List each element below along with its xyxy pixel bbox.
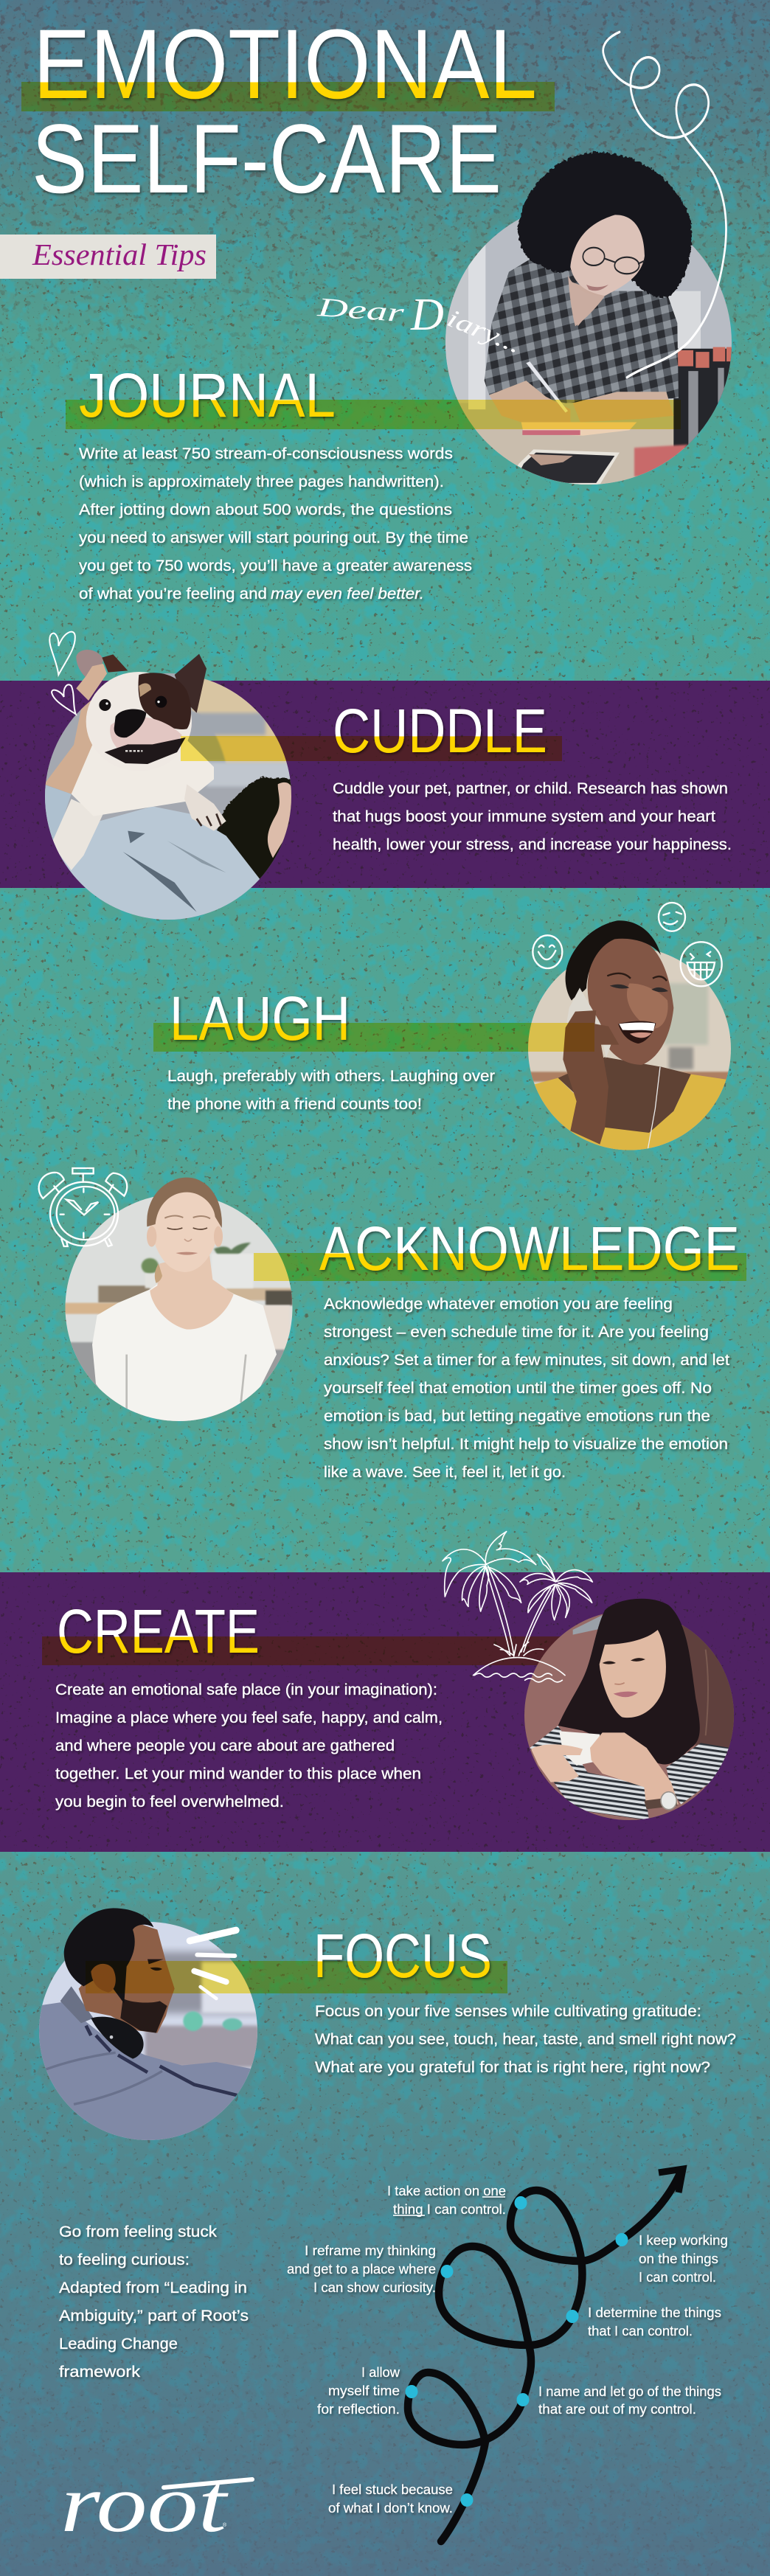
band: cuddle purple panel — [0, 681, 770, 888]
text: go from feeling stuck: to feeling curious: — [59, 2252, 190, 2268]
labels: path steps: that are out of my control. — [538, 2401, 696, 2417]
handwriting: dear diary: iary... — [443, 305, 525, 359]
band: acknowledge — [254, 1253, 746, 1281]
labels: path steps: that I can control. — [588, 2323, 693, 2339]
labels: path steps: and get to a place where — [287, 2261, 436, 2277]
labels: path steps: I feel stuck because — [332, 2482, 453, 2497]
text: focus body — [315, 2003, 736, 2076]
heading: focus: FOCUS — [313, 1921, 492, 1990]
band: create — [42, 1636, 570, 1665]
heading: laugh: LAUGH — [170, 984, 350, 1053]
text: focus body: Focus on your five senses while cultivating gratitude: — [315, 2003, 701, 2020]
text: create body — [55, 1681, 443, 1811]
text: create body: together. Let your mind wander to this place when — [55, 1766, 421, 1782]
icon: hearts — [49, 632, 76, 714]
text: laugh body: the phone with a friend counts too! — [167, 1096, 422, 1113]
text: journal body: (which is approximately three pages handwritten). — [79, 473, 444, 490]
text: journal body: of what you’re feeling and — [79, 586, 267, 603]
text: journal body: After jotting down about 500 words, the questions — [79, 501, 452, 518]
subtitle: essential tips — [0, 235, 216, 279]
text: acknowledge body: emotion is bad, but letting negative emotions run the — [324, 1408, 710, 1425]
labels: path steps: I determine the things — [588, 2305, 721, 2320]
text: go from feeling stuck: Ambiguity,” part of Root’s — [59, 2308, 249, 2325]
text: acknowledge body: anxious? Set a timer for a few minutes, sit down, and let — [324, 1352, 729, 1369]
labels: path steps: I can show curiosity. — [313, 2280, 436, 2295]
icon: curly ribbon line — [603, 32, 726, 378]
text: cuddle body: that hugs boost your immune system and your heart — [333, 808, 715, 825]
text: laugh body: Laugh, preferably with others. Laughing over — [167, 1068, 495, 1085]
icon: alarm clock — [39, 1168, 127, 1246]
labels: path steps: myself time — [328, 2383, 400, 2398]
text: go from feeling stuck: framework — [59, 2364, 141, 2381]
text: create body: and where people you care about are gathered — [55, 1737, 395, 1754]
text: create body: you begin to feel overwhelmed. — [55, 1794, 284, 1811]
labels: path steps: I keep working — [639, 2232, 728, 2248]
band: cuddle — [181, 736, 562, 761]
face — [570, 215, 645, 296]
logo: root: root — [60, 2458, 229, 2549]
text: cuddle body: Cuddle your pet, partner, or child. Research has shown — [333, 780, 728, 797]
labels: path steps: on the things — [639, 2251, 718, 2266]
labels: path steps: of what I don’t know. — [328, 2500, 453, 2516]
band: create purple panel — [0, 1572, 770, 1852]
title band — [21, 82, 555, 111]
title — [32, 10, 537, 214]
text: journal body: may even feel better. — [271, 586, 424, 603]
handwriting: dear diary — [316, 290, 525, 359]
dots on path — [406, 2196, 628, 2507]
text: focus body: What can you see, touch, hear, taste, and smell right now? — [315, 2031, 736, 2048]
labels: path steps: I take action on one — [387, 2183, 506, 2198]
band: focus — [86, 1961, 507, 1993]
handwriting: dear diary: Dear — [316, 292, 406, 327]
photo: meditating woman — [64, 1178, 295, 1426]
labels: path steps: for reflection. — [317, 2401, 400, 2417]
hair — [518, 152, 692, 297]
text: create body: Create an emotional safe place (in your imagination): — [55, 1681, 437, 1698]
photo: woman with cup — [521, 1599, 738, 1824]
text: acknowledge body: like a wave. See it, feel it, let it go. — [324, 1464, 566, 1481]
labels: path steps: thing I can control. — [393, 2201, 506, 2217]
heading: create: CREATE — [57, 1597, 260, 1666]
labels: path steps: I can control. — [639, 2269, 716, 2285]
text: laugh body — [167, 1068, 495, 1113]
text: create body: Imagine a place where you feel safe, happy, and calm, — [55, 1709, 443, 1726]
text: acknowledge body — [324, 1296, 729, 1481]
text: acknowledge body: yourself feel that emotion until the timer goes off. No — [324, 1380, 712, 1397]
text: journal body — [79, 445, 472, 603]
icon: smiley faces — [533, 903, 722, 986]
subtitle: essential tips: Essential Tips — [32, 237, 207, 271]
text: acknowledge body: show isn’t helpful. It might help to visualize the emotion — [324, 1436, 728, 1453]
labels: path steps: I allow — [361, 2364, 400, 2380]
text: journal body: Write at least 750 stream-of-consciousness words — [79, 445, 453, 462]
text: acknowledge body: strongest – even schedule time for it. Are you feeling — [324, 1324, 709, 1341]
text: go from feeling stuck: Leading Change — [59, 2336, 178, 2353]
photo: laughing woman on phone — [526, 920, 732, 1156]
photo: man with headphones — [37, 1908, 260, 2144]
title: EMOTIONAL — [33, 10, 537, 119]
icon: palm island — [443, 1532, 592, 1682]
logo: root: ® — [223, 2522, 227, 2528]
text: acknowledge body: Acknowledge whatever emotion you are feeling — [324, 1296, 673, 1313]
text: cuddle body — [333, 780, 732, 853]
text: journal body: you need to answer will start pouring out. By the time — [79, 530, 468, 546]
chart: looping path arrow — [406, 2169, 683, 2541]
photo: woman journaling — [443, 152, 738, 499]
labels: path steps: I reframe my thinking — [305, 2243, 436, 2258]
text: go from feeling stuck — [59, 2223, 249, 2381]
text: cuddle body: health, lower your stress, and increase your happiness. — [333, 836, 732, 853]
band: journal — [66, 400, 681, 429]
heading: journal: JOURNAL — [79, 361, 336, 430]
labels: path steps: I name and let go of the things — [538, 2384, 721, 2399]
text: go from feeling stuck: Go from feeling stuck — [59, 2223, 218, 2240]
title: SELF-CARE — [32, 105, 502, 214]
heading: cuddle: CUDDLE — [333, 696, 547, 765]
photo: french bulldog — [43, 650, 294, 922]
handwriting: dear diary: D — [410, 290, 444, 340]
text: focus body: What are you grateful for that is right here, right now? — [315, 2059, 710, 2076]
text: go from feeling stuck: Adapted from “Leading in — [59, 2280, 247, 2296]
band: laugh — [153, 1023, 594, 1052]
icon: white focus dashes — [190, 1930, 236, 1999]
text: journal body: you get to 750 words, you’ll have a greater awareness — [79, 558, 472, 574]
labels: path steps — [287, 2183, 728, 2516]
